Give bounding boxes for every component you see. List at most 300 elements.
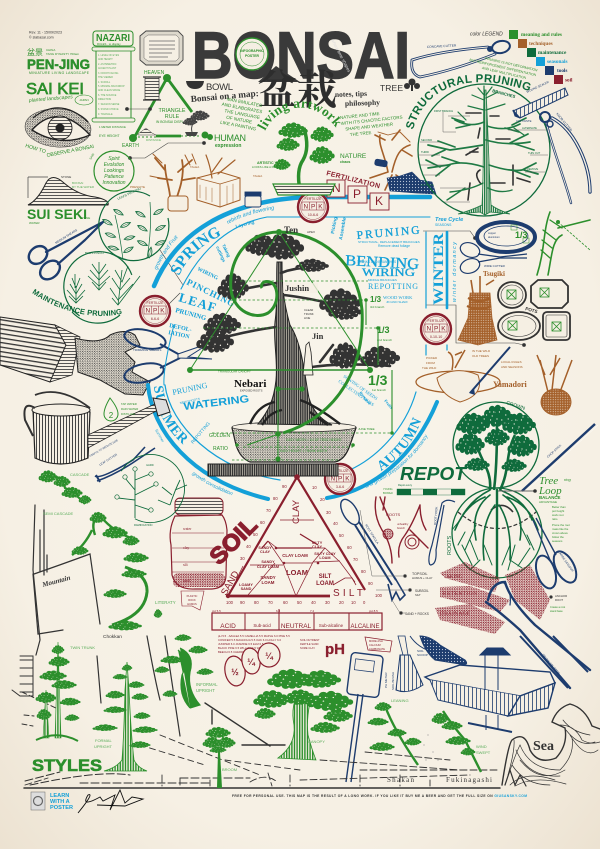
- proportion notes: 1/3: [368, 372, 388, 388]
- style: leaning: LEANING: [391, 698, 409, 703]
- ph heading and mix note: MORE ASH: [369, 639, 383, 643]
- ph heading and mix note: pH: [325, 641, 345, 658]
- winter techniques: MIDDLE BRANCHES: [368, 278, 397, 282]
- ph heading and mix note: FERTILE SAND: [300, 642, 319, 646]
- knob cutter tool: [540, 112, 590, 203]
- proportion notes: 1/3: [370, 295, 382, 304]
- fertilizer dose tokens: ¼: [247, 657, 256, 667]
- ph scale: pH 5.5: [212, 609, 221, 613]
- winter techniques: WIRING: [362, 265, 415, 279]
- tube of cut paste: CUT PASTE: [516, 119, 532, 123]
- fertilize badge autumn: 3-6-6: [336, 485, 344, 489]
- color legend: seasonals: [547, 59, 567, 65]
- concave cutter tool: CONCAVE CUTTER: [427, 43, 457, 49]
- soil jar: sand: [183, 579, 190, 583]
- triangle scales: 50: [339, 533, 344, 538]
- autumn techniques: [337, 374, 395, 411]
- mountain landscape lines: [12, 505, 500, 788]
- balance notes: seasons: [552, 539, 563, 543]
- literati note box: ROCK: [188, 598, 196, 602]
- subtitle: philosophy: [345, 98, 380, 108]
- color legend: tools: [557, 68, 567, 74]
- style: leaning: [368, 698, 421, 765]
- style: semi cascade: [43, 511, 139, 555]
- anchor root label: Create a root: [550, 605, 565, 609]
- ph heading and mix note: SOME CLAY: [300, 646, 315, 650]
- hand holding scissors: TRIMMING SHEARS: [133, 348, 161, 352]
- fertilize badge summer top: 10-6-6: [308, 213, 318, 217]
- texture names: LOAM: [262, 580, 275, 585]
- triangle scales: 50: [253, 532, 258, 537]
- yamadori notes: [422, 349, 523, 370]
- trunk splitter tool: TRUNK SPLITTER: [541, 653, 561, 676]
- knob cutter tool: KNOB CUTTER: [555, 112, 573, 133]
- leaf cutter tool: LEAF CUTTER: [98, 452, 119, 467]
- fertilizer dose tokens: ½: [231, 667, 239, 677]
- winter techniques: [330, 216, 463, 304]
- structural pruning note: AND LEAF MULTIPLICATION: [482, 66, 527, 80]
- season headings: growth and Fruit: [154, 235, 178, 270]
- bonsai part labels: CLEAR: [304, 308, 313, 312]
- autumn techniques: SOWING OF SEEDS: [342, 374, 379, 401]
- watering note with drop: TAP WATER: [121, 402, 137, 406]
- color legend: meaning and rules: [521, 32, 562, 38]
- balance notes: pot height: [552, 509, 565, 513]
- large root scissors: LARGE SCISSOR: [557, 550, 575, 573]
- seal in the letter O: POSTER: [245, 54, 260, 58]
- tsugiki graft: [458, 270, 505, 345]
- panel: structural pruning tree: ALTERNATE: [522, 126, 537, 130]
- acidity plant lists: CONIFER 5.5 MAGNOLIA 5.5 OAK 6.0 HOLLY 6.0: [218, 638, 281, 642]
- red root illustrations: unhealthy: [397, 522, 409, 526]
- sabi badge: patience wheel: Evolution: [104, 162, 124, 168]
- triangle scales: 0: [363, 600, 366, 605]
- red root illustrations: branch: [397, 526, 405, 530]
- nature label: NATURE: [340, 153, 367, 160]
- rule: one meter distance: EYE HEIGHT: [99, 134, 120, 138]
- ph heading and mix note: [300, 637, 392, 658]
- triangle scales: 90: [240, 600, 245, 605]
- style: formal upright: UPRIGHT: [94, 744, 113, 749]
- rocky navy bed: [387, 172, 436, 194]
- ph meter: [346, 652, 388, 782]
- red root illustrations: ROOTS: [386, 512, 401, 517]
- triangle scales: 90: [368, 581, 373, 586]
- triangle labels: HUMAN: [214, 133, 246, 143]
- man emulates note: MAN EMULATES: [226, 96, 263, 108]
- texture names: SAND: [241, 587, 252, 591]
- style: wind swept: [423, 711, 491, 772]
- tool: shears: MEDIUM SHEARS: [54, 228, 78, 245]
- chop stick tool: [498, 424, 598, 493]
- season headings: growth consolidation: [192, 472, 233, 496]
- panel: structural pruning tree: FIRST BRANCH: [434, 109, 453, 113]
- vintage label: [140, 31, 183, 65]
- winter techniques: STRUCTURAL, REPLACEMENT BRANCHES: [358, 240, 420, 244]
- summer band: [148, 385, 268, 499]
- panel: structural pruning tree: THIN OUT: [528, 151, 541, 155]
- panel: leaf pruning circle: [99, 186, 169, 261]
- triangle axis labels: [219, 499, 363, 599]
- soil jar: silt: [183, 563, 189, 567]
- panel: display rules scroll: AND HEIGHT: [98, 58, 113, 61]
- fertilization heading and NPK tiles: [326, 170, 389, 210]
- sabi badge: patience wheel: Patience: [104, 174, 124, 180]
- style: literati: LITERATY: [155, 600, 176, 605]
- style: twin trunk: TWIN TRUNK: [70, 645, 95, 650]
- anchor root label: ROOT: [555, 598, 563, 602]
- pruned branches in dark: [466, 113, 530, 200]
- triangle labels: DISTANCE: [146, 138, 161, 142]
- triangle scales: 90: [282, 484, 287, 489]
- saikei heading: [26, 81, 93, 105]
- nature and time note: SHAPE AND WEATHER: [345, 122, 393, 132]
- spring techniques: IATION: [168, 330, 191, 341]
- main title: BONSAI: [192, 18, 410, 92]
- panel: display rules scroll: 9. TRIANGLE: [98, 113, 113, 116]
- texture names: CLAY LOAM: [282, 553, 308, 558]
- triangle axis labels: SILT: [333, 588, 363, 599]
- triangle labels: EARTH: [122, 143, 139, 149]
- man emulates note: LIKE A PAINTING: [220, 120, 257, 132]
- saikei heading: planted landscapes: [28, 94, 74, 104]
- style: cascade: [39, 470, 91, 504]
- soil layer labels: TOPSOIL: [412, 572, 428, 576]
- balance notes: mass like the: [552, 527, 569, 531]
- concave pliers tool: [486, 582, 590, 688]
- panel: roots circle: ROOTS: [447, 535, 453, 555]
- ramification study circle: HARD: [146, 463, 154, 467]
- soil layer labels: [360, 510, 433, 616]
- proportion notes: EASY WIDTH = 1/4 OF TREE HEIGHT: [286, 438, 341, 442]
- triangle scales: 60: [283, 600, 288, 605]
- season headings: AUTUMN: [378, 416, 421, 471]
- yamadori notes: OLD TREES: [472, 354, 489, 358]
- fertilization heading and NPK tiles: K: [375, 194, 383, 208]
- texture names: LOAMY: [239, 583, 253, 587]
- proportion notes: JUNE TREE: [358, 427, 375, 431]
- triangle scales: [226, 484, 383, 605]
- season headings: SPRING: [170, 227, 220, 275]
- wiring note: 1/3: [515, 230, 528, 240]
- mountain label: Mountain: [40, 574, 71, 589]
- tube of cut paste: WOUND SEALER: [526, 80, 550, 94]
- panel: bonsai pots: [498, 280, 570, 340]
- triangle axis labels: CLAY: [291, 499, 302, 524]
- season headings: [154, 206, 458, 496]
- style: cascade: CASCADE: [70, 472, 90, 477]
- yamadori notes: THE WILD: [422, 366, 437, 370]
- acidity plant lists: BLACK PINE 6.5 WILLOW 6.5 WISTERIA: [218, 646, 270, 650]
- bonsai part labels: Nebari: [234, 378, 266, 390]
- panel: roots circle: [447, 488, 542, 578]
- texture names: SANDY: [258, 546, 272, 550]
- panel: bud pinching circle: [56, 244, 140, 323]
- subtitle: [186, 78, 420, 108]
- style: literati: [104, 552, 176, 630]
- season headings: WINTER: [431, 233, 447, 305]
- color legend: maintenance: [538, 50, 567, 56]
- man emulates note: AND ELABORATES: [221, 102, 263, 114]
- panel: display rules scroll: THE VIEWER: [98, 76, 113, 79]
- panel: display rules scroll: 4. SCROLL: [98, 81, 111, 84]
- bonsai part labels: TRUNK: [304, 312, 314, 316]
- penjing heading: CHINA: [46, 48, 55, 52]
- style: canopy: CANOPY: [308, 739, 325, 744]
- anchor root label: stand base: [550, 609, 563, 613]
- suiseki heading: STONE: [80, 216, 90, 220]
- triangle scales: 70: [353, 557, 358, 562]
- spring techniques: DEFOL-: [169, 323, 192, 334]
- nature and time note: THE TREE: [350, 130, 372, 137]
- penjing heading: TANG DYNASTY 700am: [46, 52, 80, 56]
- spring band: [154, 197, 430, 286]
- pots label: POTS: [525, 306, 538, 314]
- fertilize badge autumn: [325, 464, 355, 494]
- fertilizer dose tokens: ¼: [265, 651, 274, 661]
- soil layer labels: SUBSOIL: [415, 589, 429, 593]
- texture names: SILT: [319, 574, 332, 580]
- panel: display rules scroll: 1. LEVEL OF EYES: [98, 54, 119, 57]
- tool: shears: [25, 222, 103, 283]
- soil scoop tool: SOIL: [417, 649, 424, 653]
- watering note with drop: DISTILLED: [121, 412, 135, 416]
- tree looping heading: [538, 475, 571, 504]
- panel: structural pruning tree: SECOND: [421, 138, 432, 142]
- suiseki stone: BY THE WATER: [72, 185, 95, 189]
- styles heading: STYLES: [32, 756, 102, 775]
- pine sprigs: [67, 262, 140, 305]
- texture names: CLAY: [260, 550, 270, 554]
- triangle scales: 30: [240, 556, 245, 561]
- winter techniques: SEASONS: [435, 223, 452, 227]
- triangle labels: expression: [215, 143, 241, 149]
- panel: display rules scroll: 8. STAND CHOICE: [98, 108, 119, 111]
- penjing heading: [27, 47, 90, 75]
- triangle scales: 80: [361, 569, 366, 574]
- wire cutter tool: WIRE CUTTER: [484, 264, 506, 268]
- texture names: LOAM: [319, 556, 331, 560]
- panel: display rules scroll: 7. SEASON SENSE: [98, 103, 120, 106]
- triangle scales: 30: [326, 510, 331, 515]
- observe caption: HOW TO: [24, 143, 46, 155]
- panel: structural pruning tree: BRANCHES: [492, 88, 516, 99]
- talea labels: TALEA: [253, 174, 262, 178]
- triangle scales: 50: [297, 600, 302, 605]
- fertilize badge summer top: [298, 192, 328, 222]
- soil brush tool: [391, 636, 423, 692]
- watering note with drop: 2: [109, 411, 114, 420]
- repot heading: Repot every: [398, 483, 413, 487]
- logo: LEARN: [50, 793, 69, 799]
- fertilizer dose tokens: [223, 642, 281, 688]
- winter techniques: Assemble: [338, 217, 348, 240]
- bonsai part labels: [209, 225, 324, 452]
- autumn band: [327, 402, 437, 498]
- repot heading: REPOT: [400, 464, 468, 484]
- balance notes: Better than: [552, 505, 566, 509]
- connector lines: [125, 107, 526, 347]
- triangle scales: 20: [320, 497, 325, 502]
- brown seed illustration: [537, 355, 572, 415]
- literati note box: PLASTIC: [187, 594, 198, 598]
- yamadori notes: IN THE WILD: [472, 349, 491, 353]
- triangle labels: HEAVEN: [144, 70, 165, 76]
- sea wave: [502, 704, 600, 786]
- crown label: CROWN: [505, 400, 526, 412]
- repot heading: BONSAI: [383, 491, 393, 495]
- subtitle: BOWL: [206, 82, 233, 93]
- summer techniques: [154, 381, 250, 445]
- scroll stand in triangle: [143, 77, 161, 100]
- bonsai part labels: GOLDEN: [209, 433, 231, 439]
- penjing heading: PEN-JING: [27, 56, 90, 72]
- ph heading and mix note: SOIL NUTRIENT: [300, 638, 320, 642]
- accent rock: [138, 128, 156, 135]
- red root illustrations: [375, 497, 428, 563]
- logo: POSTER: [50, 805, 73, 811]
- rule: one meter distance: 1 METER DISTANCE: [99, 125, 126, 129]
- triangle scales: 40: [246, 544, 251, 549]
- green artwork bonsai: [273, 122, 335, 195]
- maintenance pruning arc heading: MAINTENANCE PRUNING: [32, 288, 122, 316]
- bonsai part labels: Jushin: [285, 283, 309, 293]
- tree looping heading: Tree: [539, 475, 558, 487]
- yamadori digging: [416, 347, 528, 402]
- concave cutter tool: [412, 39, 511, 77]
- penjing heading: MINIATURE LIVING LANDSCAPE: [29, 71, 90, 75]
- suiseki heading: WATER: [29, 221, 40, 225]
- glove: [75, 332, 150, 395]
- ph scale: 6.8: [276, 609, 281, 613]
- tree looping heading: ring: [564, 477, 571, 482]
- soil layer labels: SAND + ROCKS: [405, 612, 429, 616]
- bonsai part labels: Jin: [312, 331, 324, 341]
- winter techniques: PRUNING: [356, 225, 420, 242]
- sabi badge: patience wheel: [88, 151, 134, 191]
- ph scale: Sub-acid: [253, 623, 271, 628]
- autumn techniques: Fruits: [383, 398, 395, 411]
- observe caption second part: OBSERVE A BONSAI: [46, 144, 94, 159]
- texture names: [239, 541, 336, 591]
- winter techniques: REPOTTING: [368, 282, 418, 291]
- soil heading: SOIL: [204, 512, 262, 570]
- triangle scales: 10: [312, 485, 317, 490]
- wire spool: [477, 222, 535, 252]
- season headings: and growth preparation for dormancy: [366, 434, 428, 488]
- artistic value note: [252, 161, 287, 169]
- triangle scales: 40: [333, 521, 338, 526]
- watering can: [24, 392, 170, 464]
- proportion notes: [280, 295, 392, 453]
- suiseki stone: [28, 175, 108, 205]
- talea labels: [130, 165, 262, 189]
- style: formal upright: [93, 662, 158, 771]
- panel: display rules scroll: AND CLEAN SPACE: [98, 89, 121, 92]
- texture names: LOAM: [316, 581, 334, 587]
- winter techniques: WOOD WORK: [383, 295, 413, 300]
- spring techniques: Layering: [235, 219, 255, 229]
- nazari box: RULES · to display: [97, 42, 121, 46]
- ph heading and mix note: CARBONATE: [369, 647, 385, 651]
- man emulates note: OF NATURE: [226, 115, 253, 125]
- balance notes: follow the: [552, 535, 564, 539]
- leaf cutter tool: [88, 438, 155, 482]
- style: formal upright: FORMAL: [95, 738, 112, 743]
- triangle labels: IN BONSAI DISPLAY: [156, 120, 189, 124]
- winter techniques: Tree Cycle: [435, 217, 463, 223]
- leaf cutter tool: USEFUL TO REDUCE SIZE: [88, 438, 119, 458]
- panel: display rules scroll: ACCENT PLANT: [98, 67, 117, 70]
- spring techniques: [168, 219, 255, 341]
- brown techniques: air layer tree: [150, 154, 196, 211]
- autumn techniques: COLLECTING MOSS: [337, 379, 375, 407]
- triangle labels: TRIANGLE: [159, 108, 186, 114]
- texture names: CLAY LOAM: [257, 565, 279, 569]
- texture names: SILTY CLAY: [314, 552, 336, 556]
- fertilize badge spring: 6-6-6: [151, 317, 159, 321]
- ph meter: PH METER: [384, 672, 388, 688]
- triangle scales: 100: [226, 600, 234, 605]
- ph scale: 7.2: [310, 609, 315, 613]
- proportion notes: 3rd branch: [370, 305, 385, 309]
- soil texture triangle: [219, 474, 383, 605]
- proportion notes: EASY HEIGHT = TRUNK WIDTH: [280, 449, 328, 453]
- shakan and fukinagashi labels: Shakan: [387, 776, 414, 784]
- suiseki heading: SUI SEKI: [27, 207, 87, 222]
- small display tree: [183, 110, 209, 136]
- triangle scales: 70: [266, 508, 271, 513]
- triangle scales: 60: [260, 520, 265, 525]
- winter techniques: Picking: [330, 216, 339, 234]
- spring techniques: LEAF: [177, 290, 218, 315]
- acidity plant lists: JUNIPER 6.0 JASMINE 6.5 ELM 6.5: [218, 642, 264, 646]
- style: wind swept: SWEPT: [476, 750, 491, 755]
- ph scale: pH 8.5: [369, 609, 378, 613]
- season headings: rebirth and flowering: [227, 206, 274, 224]
- triangle scales: 40: [311, 600, 316, 605]
- triangle scales: 70: [268, 600, 273, 605]
- yamadori notes: LOCAL RULES: [501, 360, 522, 364]
- golden spiral and triangle canopy: [187, 229, 394, 462]
- winter techniques: Remove dead foliage: [378, 244, 410, 248]
- soil jar: water: [183, 527, 192, 531]
- bonsai part labels: RATIO: [213, 446, 228, 452]
- soil scoop tool: SCOOP: [417, 653, 428, 657]
- pot drainage marks: [507, 288, 561, 331]
- style: broom: [203, 727, 237, 788]
- foliage clusters: [196, 233, 400, 369]
- triangle scales: 100: [375, 593, 383, 598]
- kanji title: 盆栽: [257, 67, 337, 113]
- wired green tree trunk: [537, 212, 590, 275]
- panel: structural pruning tree: REMOVE: [527, 167, 539, 171]
- chop stick tool: CHOP STICK: [546, 444, 562, 459]
- summer techniques: REPOTTING: [190, 421, 211, 445]
- ph scale: NEUTRAL: [281, 623, 312, 630]
- texture names: SANDY: [260, 575, 276, 580]
- ph heading and mix note: CALCIUM: [369, 643, 381, 647]
- style: informal upright: INFORMAL: [196, 682, 218, 687]
- yamadori notes: FROM: [426, 361, 435, 365]
- balance notes: ratio: [552, 517, 558, 521]
- living artwork arc heading: living artwork: [256, 101, 340, 131]
- soil profile speckled bands: DRAINAGE: [440, 611, 470, 617]
- style: informal upright: UPRIGHT: [196, 688, 215, 693]
- summer techniques: PRUNING: [172, 381, 208, 397]
- penjing heading: 盆景: [27, 47, 43, 57]
- literati note box: [181, 591, 204, 610]
